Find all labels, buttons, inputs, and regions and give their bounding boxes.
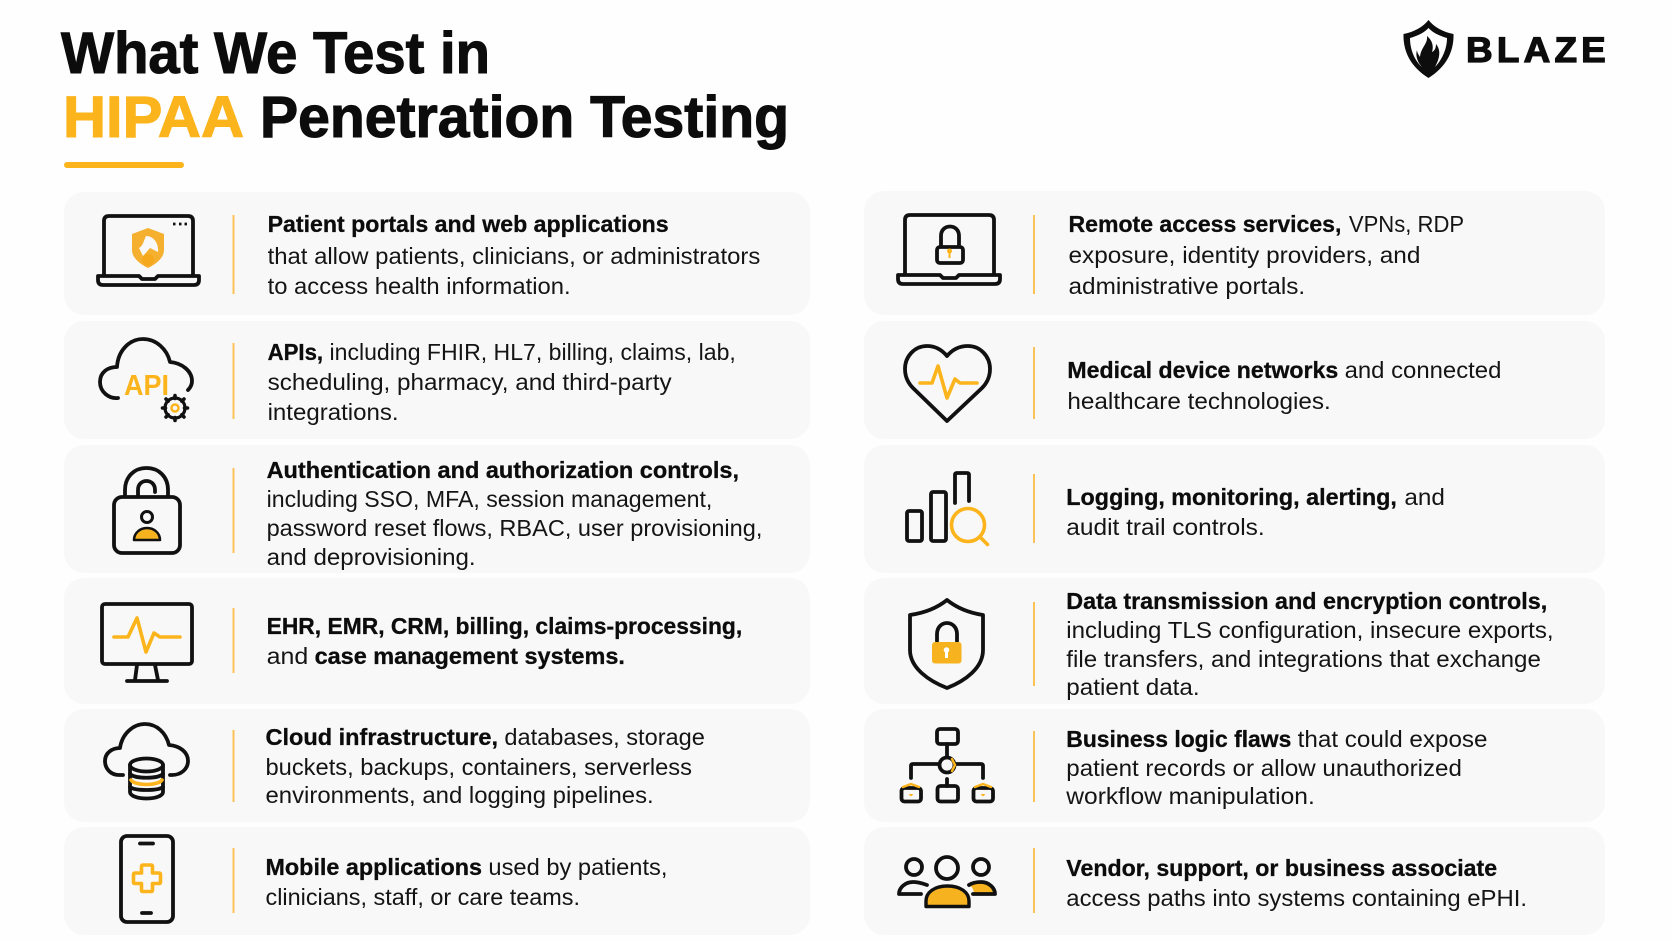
panel: APIs: integrations.	[268, 399, 399, 425]
panel: business logic flaws: that could expose	[1298, 726, 1488, 752]
panel: patient portals: that allow patients, clinicians, or administrators	[268, 243, 760, 269]
panel: mobile applications	[64, 827, 810, 935]
title: What We Test in	[61, 21, 490, 86]
panel: remote access: administrative portals.	[1068, 273, 1305, 299]
panel: cloud infrastructure	[64, 709, 810, 822]
panel: remote access: VPNs, RDP	[1349, 211, 1464, 237]
panel: vendor access: access paths into systems containing ePHI.	[1066, 885, 1527, 911]
panel: data transmission: file transfers, and integrations that exchange	[1066, 646, 1541, 672]
panel: logging and monitoring: audit trail controls.	[1066, 514, 1265, 540]
panel: data transmission	[864, 578, 1605, 704]
icon: laptop with lock	[898, 215, 1000, 284]
panel: data transmission: Data transmission and encryption controls,	[1066, 588, 1547, 614]
panel: medical device networks: healthcare technologies.	[1067, 388, 1331, 414]
icon: cloud with database	[105, 724, 188, 798]
panel: APIs: APIs,	[268, 339, 323, 365]
panel: remote access: Remote access services,	[1068, 211, 1341, 237]
icon: heart with pulse	[905, 346, 990, 421]
icon: shield with lock	[910, 600, 983, 688]
panel: cloud infrastructure: databases, storage	[504, 724, 705, 750]
panel: vendor access	[864, 827, 1605, 935]
icon: padlock with user	[114, 468, 180, 553]
title	[61, 21, 789, 150]
panel: vendor access: Vendor, support, or business associate	[1066, 855, 1497, 881]
panel: authentication	[64, 445, 810, 573]
title: HIPAA	[63, 85, 244, 150]
icon: three people	[899, 857, 995, 906]
panel: EHR systems: EHR, EMR, CRM, billing, claims-processing,	[267, 613, 742, 639]
title: Penetration Testing	[260, 85, 789, 150]
panel: APIs: scheduling, pharmacy, and third-party	[268, 369, 672, 395]
icon: phone with medical cross	[121, 836, 173, 922]
panel: data transmission: including TLS configuration, insecure exports,	[1066, 617, 1554, 643]
panel: authentication: Authentication and authorization controls,	[267, 457, 739, 483]
panel: patient portals	[64, 192, 810, 315]
panel: medical device networks	[864, 321, 1605, 439]
panel: patient portals: Patient portals and web applications	[268, 211, 669, 237]
logo: Blaze	[1403, 20, 1610, 78]
wordmark: BLAZE	[1466, 31, 1610, 70]
panel: mobile applications: Mobile applications	[266, 854, 482, 880]
panel: APIs	[64, 321, 810, 439]
panel: authentication: password reset flows, RBAC, user provisioning,	[267, 515, 762, 541]
icon: monitor with pulse	[102, 604, 192, 681]
icon: laptop with shield	[98, 216, 199, 285]
panel: business logic flaws	[864, 709, 1605, 822]
panel: mobile applications: clinicians, staff, or care teams.	[266, 884, 580, 910]
panel: business logic flaws: Business logic flaws	[1066, 726, 1291, 752]
panel: cloud infrastructure: environments, and logging pipelines.	[266, 782, 654, 808]
title underline	[64, 162, 184, 168]
panel: logging and monitoring: and	[1404, 484, 1445, 510]
panel: remote access	[864, 191, 1605, 315]
panel: authentication: including SSO, MFA, session management,	[267, 486, 712, 512]
panel: authentication: and deprovisioning.	[267, 544, 476, 570]
icon: API cloud with gear	[100, 339, 192, 420]
icon: API cloud with gear: API	[124, 370, 169, 402]
panel: patient portals: to access health information.	[268, 273, 571, 299]
panel: business logic flaws: patient records or allow unauthorized	[1066, 755, 1462, 781]
panel: data transmission: patient data.	[1066, 674, 1200, 700]
panel: EHR systems: case management systems.	[315, 643, 625, 669]
icon: bar chart with magnifier	[907, 473, 988, 544]
panel: remote access: exposure, identity providers, and	[1068, 242, 1420, 268]
icon: workflow tree	[902, 729, 993, 802]
panel: logging and monitoring: Logging, monitoring, alerting,	[1066, 484, 1397, 510]
icon: shield with flame	[1403, 20, 1454, 78]
panel: logging and monitoring	[864, 445, 1605, 573]
panel: EHR systems	[64, 578, 810, 704]
panel: medical device networks: Medical device networks	[1067, 357, 1338, 383]
panel: cloud infrastructure: buckets, backups, containers, serverless	[266, 754, 692, 780]
panel: APIs: including FHIR, HL7, billing, claims, lab,	[330, 339, 736, 365]
panel: mobile applications: used by patients,	[488, 854, 668, 880]
panel: medical device networks: and connected	[1345, 357, 1501, 383]
panel: cloud infrastructure: Cloud infrastructure,	[266, 724, 498, 750]
panel: business logic flaws: workflow manipulation.	[1065, 783, 1315, 809]
panel: EHR systems: and	[267, 643, 308, 669]
